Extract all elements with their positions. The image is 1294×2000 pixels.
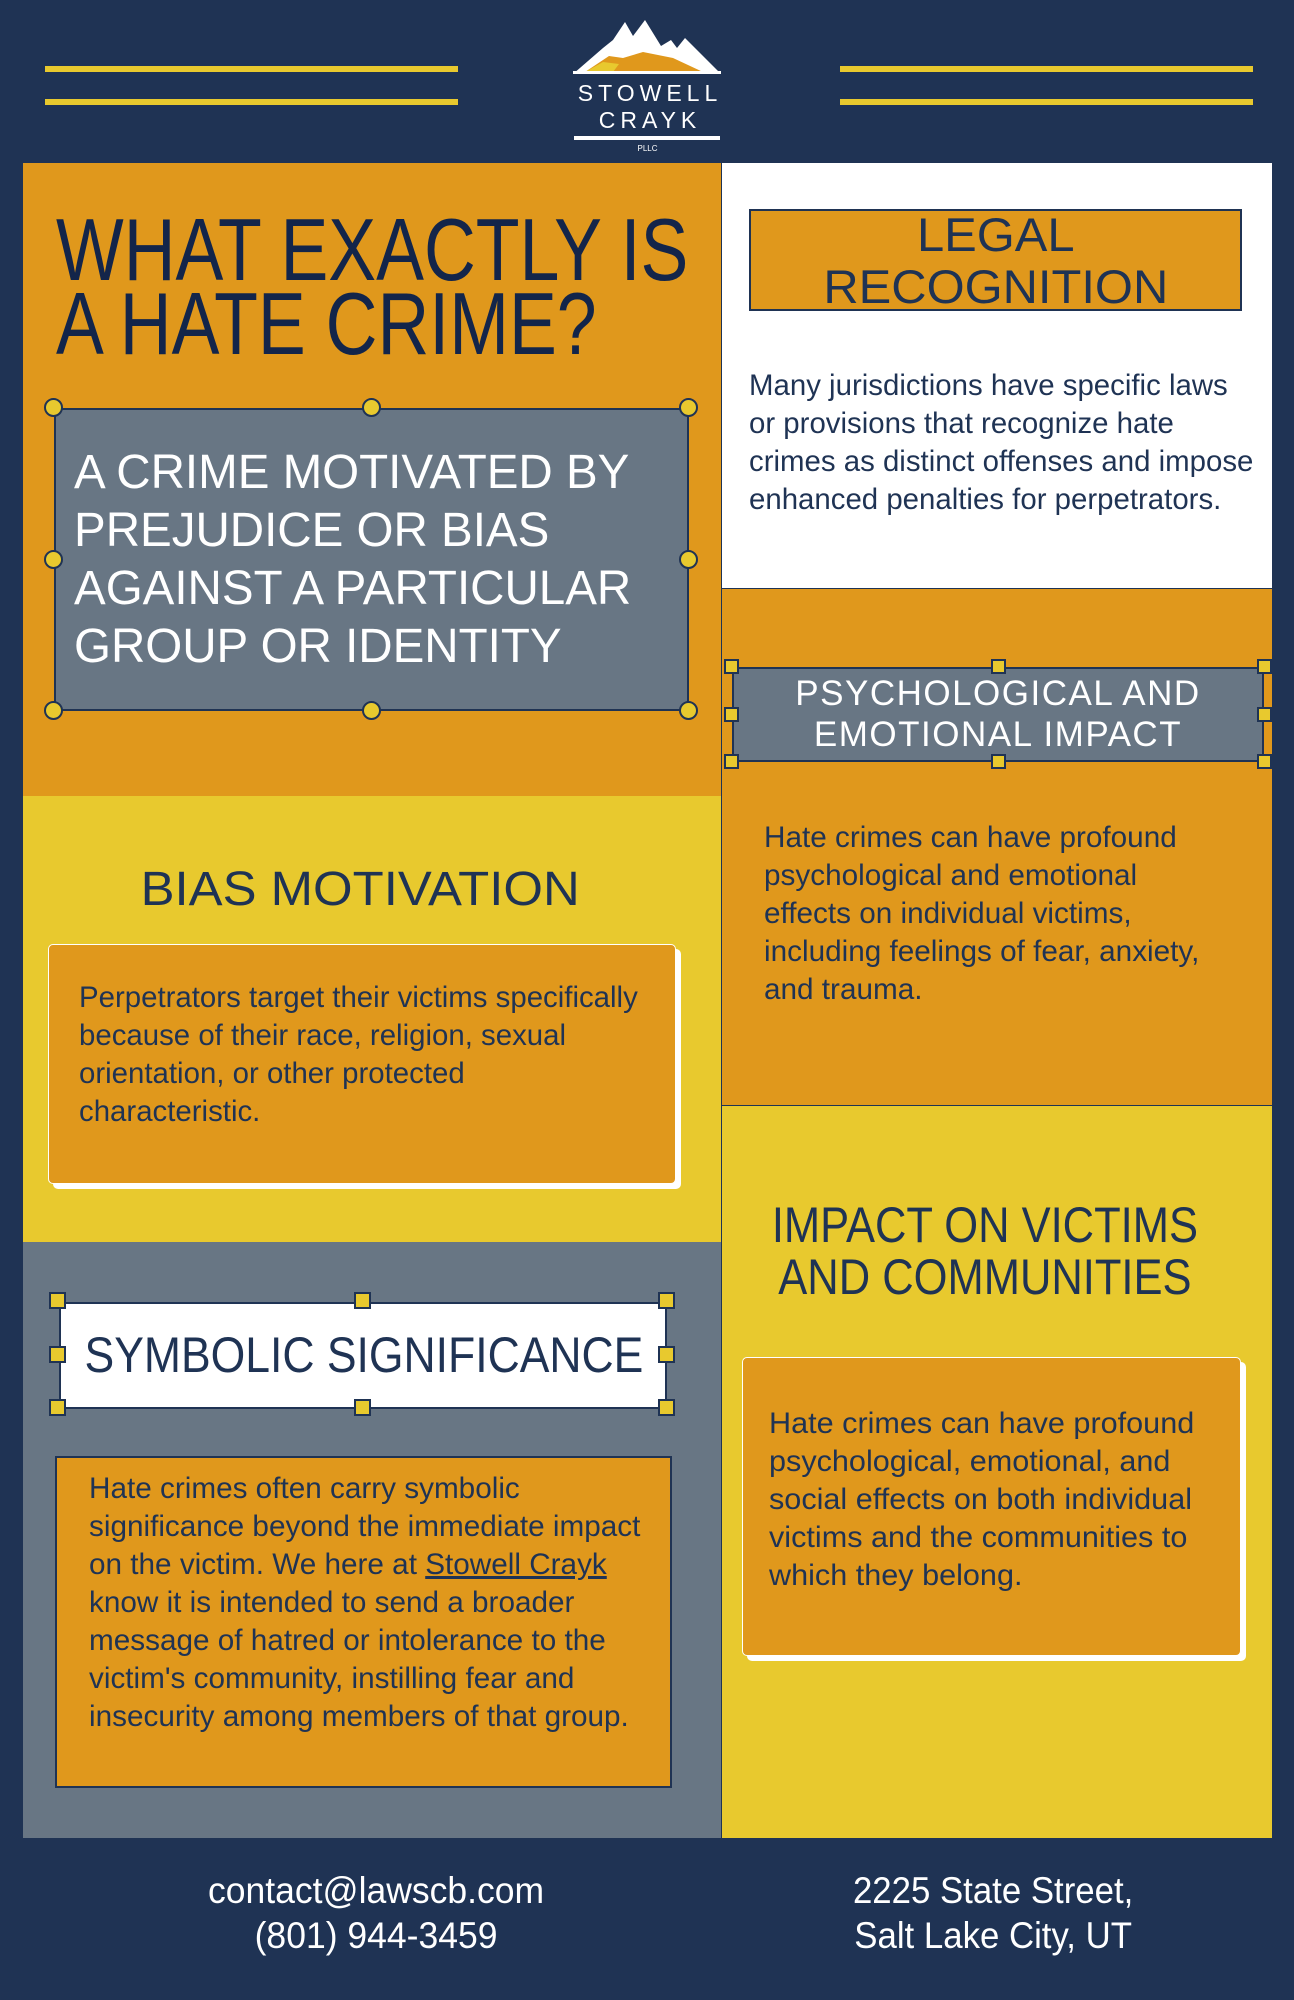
panel: psychological and emotional impact (721, 588, 1272, 1105)
text box: message of hatred or intolerance to the (89, 1624, 606, 1657)
logo (573, 20, 722, 153)
heading box (749, 209, 1242, 311)
text box: orientation, or other protected (79, 1057, 465, 1090)
footer: contact: (801) 944-3459 (255, 1915, 497, 1956)
text box: know it is intended to send a broader (89, 1586, 574, 1619)
heading box: LEGAL (917, 208, 1074, 261)
panel: bias motivation (23, 796, 721, 1242)
logo: PLLC (637, 144, 658, 153)
title: A HATE CRIME? (56, 274, 597, 373)
definition box: A CRIME MOTIVATED BY (74, 446, 629, 499)
text: psychological and emotional (764, 859, 1137, 892)
logo text: CRAYK (599, 107, 701, 133)
heading: BIAS MOTIVATION (141, 863, 580, 916)
panel: legal recognition (721, 163, 1272, 588)
footer: contact: contact@lawscb.com (208, 1870, 544, 1911)
text: Hate crimes can have profound (764, 821, 1177, 854)
heading box: RECOGNITION (823, 260, 1168, 313)
definition box (54, 408, 689, 711)
text: Many jurisdictions have specific laws (749, 369, 1228, 402)
panel: impact on victims and communities (721, 1105, 1272, 1838)
text box: Perpetrators target their victims specifically (79, 981, 638, 1014)
text: and trauma. (764, 973, 922, 1006)
heading: IMPACT ON VICTIMS (772, 1197, 1198, 1253)
heading box: SYMBOLIC SIGNIFICANCE (85, 1327, 643, 1383)
heading box: PSYCHOLOGICAL AND (795, 674, 1201, 713)
text: enhanced penalties for perpetrators. (749, 483, 1221, 516)
panel: symbolic significance (23, 1242, 721, 1838)
text box (55, 1456, 672, 1788)
panel: what exactly is a hate crime (23, 163, 721, 796)
text box: significance beyond the immediate impact (89, 1510, 640, 1543)
decorative lines left (45, 66, 458, 105)
text box: because of their race, religion, sexual (79, 1019, 566, 1052)
heading (772, 1197, 1198, 1305)
text box (48, 944, 676, 1184)
footer: contact (208, 1870, 544, 1956)
heading: AND COMMUNITIES (778, 1249, 1192, 1305)
footer: address: Salt Lake City, UT (854, 1915, 1132, 1956)
text: crimes as distinct offenses and impose (749, 445, 1253, 478)
logo text: STOWELL (578, 80, 722, 106)
text box: insecurity among members of that group. (89, 1700, 629, 1733)
heading box: EMOTIONAL IMPACT (814, 715, 1182, 754)
definition box: AGAINST A PARTICULAR (74, 562, 631, 615)
heading box (59, 1302, 667, 1409)
text box: on the victim. We here at Stowell Crayk (89, 1548, 607, 1581)
footer: address: 2225 State Street, (853, 1870, 1133, 1911)
title (56, 200, 688, 373)
text: including feelings of fear, anxiety, (764, 935, 1199, 968)
definition box: PREJUDICE OR BIAS (74, 504, 549, 557)
title: WHAT EXACTLY IS (56, 200, 688, 299)
text (764, 821, 1199, 1006)
text box: victim's community, instilling fear and (89, 1662, 574, 1695)
text box: which they belong. (769, 1559, 1022, 1592)
text box: victims and the communities to (769, 1521, 1187, 1554)
text box (742, 1357, 1241, 1656)
text box: psychological, emotional, and (769, 1445, 1170, 1478)
logo text (578, 80, 722, 133)
footer: address (853, 1870, 1133, 1956)
decorative lines right (840, 66, 1253, 105)
text: or provisions that recognize hate (749, 407, 1174, 440)
heading box (732, 667, 1264, 762)
definition box: GROUP OR IDENTITY (74, 620, 562, 673)
text: effects on individual victims, (764, 897, 1132, 930)
text box: Hate crimes often carry symbolic (89, 1472, 520, 1505)
text (749, 369, 1253, 516)
text box: characteristic. (79, 1095, 260, 1128)
text box: Hate crimes can have profound (769, 1407, 1194, 1440)
text box: social effects on both individual (769, 1483, 1192, 1516)
icon: mountain (573, 20, 721, 74)
